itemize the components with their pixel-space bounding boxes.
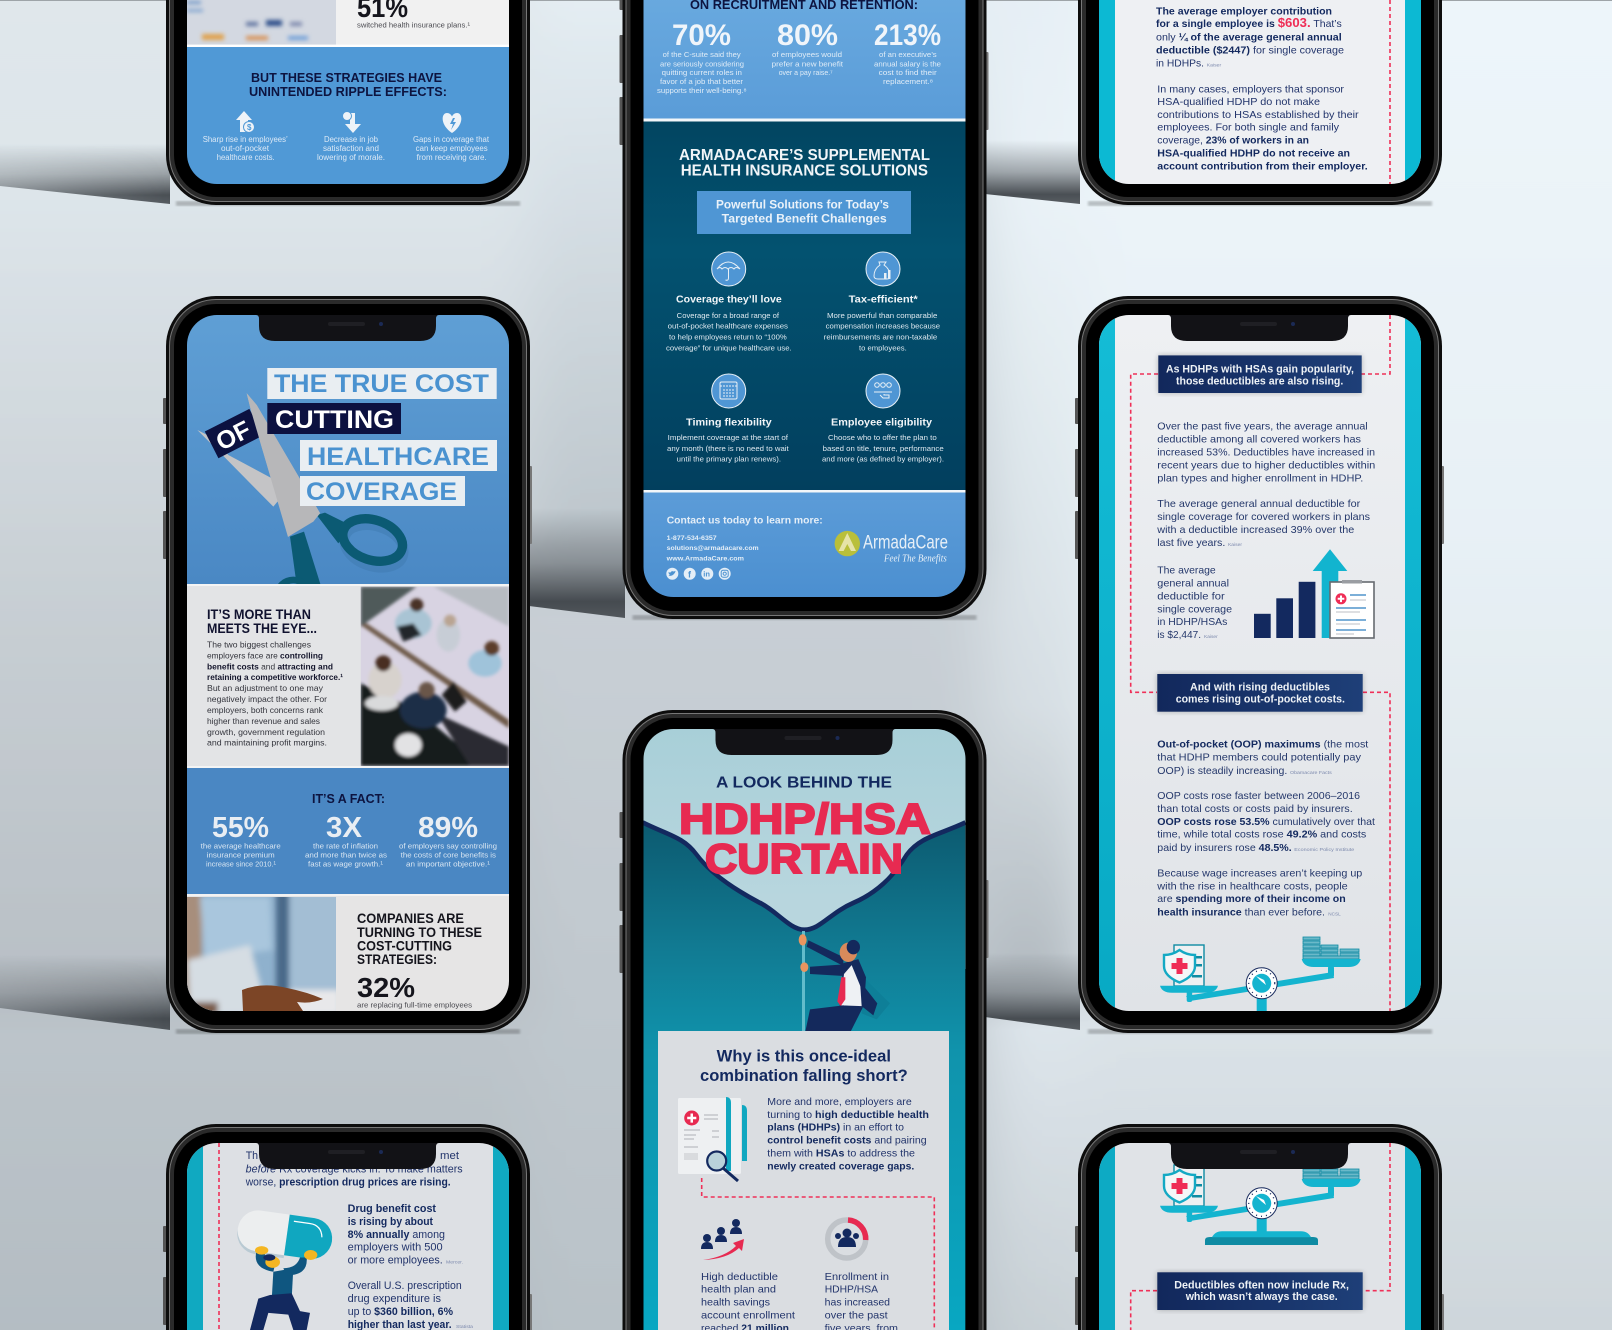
text: enrollment increase bbox=[825, 1272, 898, 1330]
text: rx intro: worse, prescription drug prices are rising. bbox=[245, 1176, 451, 1188]
captions: facts: an important objective.¹ bbox=[406, 859, 490, 868]
panel: recruitment and retention stats bbox=[643, 0, 966, 118]
text: challenges paragraph: growth, government regulation bbox=[207, 727, 325, 737]
screen: employer contribution bbox=[1099, 0, 1421, 184]
title: cutting: CUTTING bbox=[275, 406, 394, 434]
feature: coverage they'll love bbox=[666, 294, 792, 352]
stat: 32% bbox=[357, 978, 472, 1009]
text: us prescription expenditure: Overall U.S. prescription bbox=[348, 1280, 462, 1292]
feature: timing flexibility: until the primary plan renews). bbox=[677, 455, 781, 464]
feature: coverage they'll love: coverage” for unique healthcare use. bbox=[666, 343, 792, 352]
text: challenges paragraph: higher than revenue and sales bbox=[207, 716, 320, 726]
text: general annual deductible: with a deductible increased 39% over the bbox=[1156, 525, 1355, 536]
panel: contact footer bbox=[643, 492, 966, 598]
text: oop costs rose: Economic Policy Institute bbox=[1294, 847, 1355, 852]
icon: calendar bbox=[712, 374, 746, 408]
banner: deductibles rising bbox=[1158, 355, 1362, 393]
text: rx intro: met bbox=[440, 1150, 459, 1162]
heading: ripple effects bbox=[250, 73, 446, 96]
text: contact details bbox=[666, 514, 823, 562]
logo: armadacare: Feel The Benefits bbox=[883, 553, 947, 565]
feature: employee eligibility bbox=[822, 416, 944, 464]
heading: cost-cutting strategies: STRATEGIES: bbox=[357, 952, 437, 967]
title: hdhp/hsa curtain bbox=[679, 795, 931, 882]
text: oop costs rose: OOP costs rose faster between 2006–2016 bbox=[1157, 791, 1360, 802]
text: $2,447 deductible: general annual bbox=[1157, 579, 1229, 590]
heading: cost-cutting strategies: TURNING TO THESE bbox=[357, 925, 482, 940]
text: challenges paragraph: negatively impact the other. For bbox=[207, 694, 327, 704]
text: $2,447 deductible: Kaiser bbox=[1204, 634, 1218, 639]
screen: rising deductibles bbox=[1099, 315, 1421, 1025]
icon: cost arrow up bbox=[236, 111, 254, 132]
captions: ripple effects: satisfaction and bbox=[323, 144, 379, 153]
text: past five years bbox=[1157, 422, 1376, 484]
text: oop costs rose: time, while total costs rose 49.2% and costs bbox=[1157, 830, 1366, 841]
text: challenges paragraph: benefit costs and attracting and bbox=[207, 661, 333, 671]
panel: cost-cutting strategies bbox=[180, 890, 509, 1015]
heading: more than meets the eye bbox=[208, 610, 316, 633]
panel: more than meets the eye bbox=[187, 584, 509, 768]
heading: ripple effects: UNINTENDED RIPPLE EFFECTS: bbox=[249, 84, 447, 99]
logo: armadacare bbox=[835, 531, 948, 565]
panel: why is this once-ideal combination falling short bbox=[658, 1031, 949, 1330]
text: drug benefit cost: employers with 500 bbox=[348, 1242, 443, 1254]
banner: deductibles rising: those deductibles are also rising. bbox=[1176, 376, 1343, 388]
heading: why falling short: Why is this once-ideal bbox=[717, 1048, 891, 1066]
captions: facts: fast as wage growth.¹ bbox=[308, 859, 383, 868]
captions: ripple effects: Sharp rise in employees’ bbox=[203, 135, 288, 144]
phone: hdhp/hsa curtain screen (bottom center) bbox=[620, 710, 988, 1330]
stats: 55%, 3X, 89% bbox=[212, 816, 478, 838]
heading: it's a fact: IT’S A FACT: bbox=[312, 791, 385, 806]
text: wage increases: with the rise in healthcare costs, people bbox=[1156, 882, 1348, 893]
heading: more than meets the eye: IT’S MORE THAN bbox=[207, 607, 311, 622]
text: enrollment increase: Enrollment in bbox=[825, 1272, 889, 1283]
text: past five years: increased 53%. Deductibles have increased in bbox=[1157, 447, 1375, 458]
feature: tax-efficient: More powerful than comparable bbox=[827, 311, 937, 320]
phone: deductibles include rx screen (bottom right) bbox=[1075, 1124, 1444, 1330]
feature: employee eligibility: and more (as defined by employer). bbox=[822, 455, 944, 464]
text: wage increases bbox=[1156, 868, 1363, 918]
feature: employee eligibility: Choose who to offer the plan to bbox=[828, 433, 937, 442]
screen: curtain bbox=[643, 729, 966, 1330]
heading: supplemental solutions: HEALTH INSURANCE SOLUTIONS bbox=[681, 163, 928, 180]
text: enrollment increase: has increased bbox=[825, 1298, 890, 1308]
text: employers turning to hdhps: plans (HDHPs) in an effort to bbox=[767, 1123, 904, 1134]
captions: facts: insurance premium bbox=[207, 850, 275, 860]
panel: title area bbox=[187, 315, 509, 610]
text: challenges paragraph: retaining a competitive workforce.¹ bbox=[207, 672, 343, 682]
stats: 55%, 3X, 89%: 89% bbox=[418, 812, 478, 844]
banner: deductibles include rx bbox=[1157, 1272, 1363, 1310]
feature: tax-efficient bbox=[824, 294, 940, 352]
text: challenges paragraph: But an adjustment to one may bbox=[207, 683, 324, 693]
captions: recruitment stats: quitting current roles in bbox=[662, 68, 742, 77]
text: past five years: deductible among all covered workers has bbox=[1157, 435, 1361, 446]
feature: timing flexibility bbox=[667, 416, 789, 464]
icon: people with rising arrow bbox=[701, 1219, 744, 1260]
illustration: balance scale bbox=[1160, 937, 1361, 1025]
illustration: curtain bbox=[643, 823, 965, 1330]
heading: cost-cutting strategies: COMPANIES ARE bbox=[357, 911, 464, 926]
text: hsa contributions: contributions to HSAs established by their bbox=[1157, 110, 1359, 121]
callout: powerful solutions bbox=[697, 191, 911, 234]
icon: money bag with chart bbox=[866, 252, 900, 286]
text: us prescription expenditure: drug expenditure is bbox=[348, 1293, 441, 1305]
text: hsa contributions: HSA-qualified HDHP do not make bbox=[1157, 97, 1320, 108]
icon: morale arrow down bbox=[342, 112, 361, 133]
text: oop maximums bbox=[1157, 740, 1368, 777]
captions: recruitment stats: of the C-suite said they bbox=[663, 50, 741, 59]
text: past five years: Over the past five years, the average annual bbox=[1157, 422, 1368, 433]
text: $2,447 deductible: The average bbox=[1157, 566, 1216, 577]
captions: ripple effects bbox=[203, 135, 490, 162]
text: $2,447 deductible bbox=[1157, 566, 1232, 641]
text: contact details: Contact us today to learn more: bbox=[667, 514, 823, 526]
icon: medical receipt with magnifier bbox=[678, 1097, 752, 1181]
text: average employer contribution: in HDHPs. bbox=[1156, 58, 1204, 69]
title: hdhp/hsa curtain: HDHP/HSA bbox=[679, 795, 931, 843]
captions: recruitment stats: annual salary is the bbox=[874, 59, 941, 68]
text: drug benefit cost: is rising by about bbox=[348, 1216, 433, 1228]
text: challenges paragraph: and maintaining profit margins. bbox=[207, 738, 327, 748]
phone: the true cost screen (middle left) bbox=[163, 296, 532, 1034]
text: drug benefit cost: Drug benefit cost bbox=[348, 1203, 436, 1215]
text: drug benefit cost: Mercer. bbox=[446, 1260, 463, 1265]
icon: people and hand bbox=[866, 374, 900, 408]
feature: timing flexibility: any month (there is no need to wait bbox=[667, 444, 789, 453]
illustration: curtain edge bbox=[643, 823, 965, 930]
feature: tax-efficient: to employees. bbox=[859, 343, 907, 352]
panel: unintended ripple effects bbox=[187, 47, 509, 184]
illustration: man pulling curtain rope bbox=[799, 931, 890, 1031]
feature: timing flexibility: Timing flexibility bbox=[686, 416, 772, 428]
text: $2,447 deductible: is $2,447. bbox=[1157, 630, 1201, 641]
screen: true cost bbox=[180, 315, 509, 1015]
icon: broken heart bbox=[443, 113, 461, 133]
banner: deductibles rising: As HDHPs with HSAs gain popularity, bbox=[1166, 363, 1354, 375]
title: the true cost: THE TRUE COST bbox=[274, 370, 489, 398]
text: $2,447 deductible: single coverage bbox=[1157, 604, 1232, 615]
text: enrollment increase: over the past bbox=[825, 1310, 888, 1321]
text: rx intro: Th bbox=[246, 1150, 258, 1162]
text: $2,447 deductible: deductible for bbox=[1157, 591, 1225, 602]
captions: facts: the average healthcare bbox=[201, 842, 281, 851]
callout: powerful solutions: Powerful Solutions for Today’s bbox=[716, 198, 889, 212]
heading: cost-cutting strategies: COST-CUTTING bbox=[357, 938, 452, 953]
text: challenges paragraph: employers, both concerns rank bbox=[207, 705, 324, 715]
captions: facts bbox=[201, 842, 497, 868]
chart: rising bars with arrow and clipboard bbox=[1254, 549, 1374, 638]
photo: man at desk bbox=[187, 897, 336, 1011]
text: hdhp enrollment 21 million: account enrollment bbox=[701, 1310, 795, 1321]
screen: ripple effects bbox=[187, 0, 509, 184]
text: wage increases: health insurance than ever before. bbox=[1157, 907, 1325, 918]
screen: armadacare solutions bbox=[643, 0, 966, 598]
captions: ripple effects: Decrease in job bbox=[324, 135, 379, 144]
stats: 70%, 80%, 213% bbox=[672, 19, 941, 52]
text: average employer contribution: deductible ($2447) for single coverage bbox=[1156, 45, 1344, 56]
heading: supplemental solutions bbox=[679, 147, 930, 180]
captions: ripple effects: healthcare costs. bbox=[217, 153, 275, 162]
icon: cost arrow up: $ bbox=[247, 123, 252, 132]
feature: coverage they'll love: out-of-pocket healthcare expenses bbox=[668, 322, 788, 331]
text: employers turning to hdhps: turning to high deductible health bbox=[767, 1110, 929, 1121]
text: hsa contributions: account contribution from their employer. bbox=[1157, 161, 1368, 172]
illustration: balance scale bbox=[1160, 1157, 1361, 1245]
text: hdhp enrollment 21 million: health plan and bbox=[701, 1285, 776, 1296]
text: challenges paragraph: The two biggest challenges bbox=[207, 639, 311, 649]
captions: facts: of employers say controlling bbox=[399, 842, 497, 851]
phone: armadacare solutions screen (top center) bbox=[620, 0, 988, 620]
text: us prescription expenditure: up to $360 billion, 6% bbox=[348, 1306, 454, 1318]
heading: more than meets the eye: MEETS THE EYE... bbox=[207, 621, 317, 636]
icon: umbrella bbox=[712, 252, 746, 286]
banner: deductibles include rx: which wasn’t always the case. bbox=[1185, 1291, 1338, 1303]
captions: facts: the rate of inflation bbox=[313, 842, 378, 851]
text: us prescription expenditure bbox=[348, 1280, 474, 1330]
callout: powerful solutions: Targeted Benefit Challenges bbox=[722, 212, 887, 226]
captions: facts: increase since 2010.¹ bbox=[206, 859, 276, 868]
text: drug benefit cost: 8% annually among bbox=[348, 1229, 445, 1241]
feature: employee eligibility: based on title, tenure, performance bbox=[823, 444, 944, 453]
text: hsa contributions bbox=[1157, 84, 1368, 172]
captions: recruitment stats: replacement.⁸ bbox=[883, 77, 933, 86]
text: rx intro bbox=[245, 1150, 463, 1188]
feature: employee eligibility: Employee eligibility bbox=[831, 416, 932, 428]
text: contact details: solutions@armadacare.com bbox=[667, 545, 759, 552]
text: employers turning to hdhps bbox=[767, 1097, 929, 1173]
captions: facts: the costs of core benefits is bbox=[401, 850, 496, 860]
text: drug benefit cost: or more employees. bbox=[348, 1255, 443, 1267]
text: hdhp enrollment 21 million bbox=[701, 1272, 795, 1330]
text: hsa contributions: coverage, 23% of workers in an bbox=[1157, 136, 1309, 147]
feature: coverage they'll love: Coverage they’ll love bbox=[676, 294, 782, 306]
text: oop costs rose: paid by insurers rose 48.5%. bbox=[1157, 843, 1292, 854]
icons: social media: f bbox=[688, 570, 692, 580]
feature: coverage they'll love: Coverage for a broad range of bbox=[677, 311, 779, 320]
icons: social media bbox=[666, 568, 731, 580]
text: general annual deductible: single coverage for covered workers in plans bbox=[1157, 512, 1370, 523]
captions: recruitment stats: favor of a job that better bbox=[660, 77, 744, 86]
text: oop costs rose: than total costs or costs paid by insurers. bbox=[1157, 804, 1353, 815]
text: oop maximums: Out-of-pocket (OOP) maximums (the most bbox=[1157, 740, 1368, 751]
feature: coverage they'll love: to help employees return to “100% bbox=[669, 332, 787, 342]
heading: supplemental solutions: ARMADACARE’S SUPPLEMENTAL bbox=[679, 147, 930, 164]
stats: 70%, 80%, 213%: 213% bbox=[874, 19, 941, 52]
heading: why falling short bbox=[700, 1048, 908, 1085]
text: hsa contributions: HSA-qualified HDHP do not receive an bbox=[1157, 148, 1350, 159]
icon: enrollment ring bbox=[828, 1220, 866, 1258]
text: employers turning to hdhps: More and more, employers are bbox=[767, 1097, 912, 1108]
text: past five years: recent years due to higher deductibles within bbox=[1157, 460, 1376, 471]
text: $2,447 deductible: in HDHP/HSAs bbox=[1157, 617, 1227, 628]
text: average employer contribution: The average employer contribution bbox=[1156, 6, 1332, 17]
title: of (rotated tag) bbox=[205, 409, 263, 459]
captions: recruitment stats: cost to find their bbox=[879, 68, 937, 77]
title: a look behind the: A LOOK BEHIND THE bbox=[716, 775, 892, 792]
logo: armadacare: ArmadaCare bbox=[863, 532, 948, 553]
stat: 32%: 32% bbox=[357, 972, 415, 1003]
icon: scissors upper blade bbox=[247, 393, 320, 537]
text: wage increases: are spending more of their income on bbox=[1157, 894, 1346, 905]
title: hdhp/hsa curtain: CURTAIN bbox=[705, 835, 903, 882]
captions: recruitment stats: of employees would bbox=[772, 50, 842, 59]
photo: blurred chart printout bbox=[187, 0, 336, 45]
captions: recruitment stats bbox=[657, 50, 941, 95]
title: healthcare: HEALTHCARE bbox=[307, 443, 489, 471]
text: us prescription expenditure: Statista bbox=[456, 1324, 474, 1329]
text: contact details: www.ArmadaCare.com bbox=[666, 556, 744, 562]
stats: 70%, 80%, 213%: 70% bbox=[672, 19, 731, 52]
icon: person lifting pill bbox=[235, 1208, 335, 1330]
stat: 32%: are replacing full-time employees bbox=[357, 1000, 472, 1010]
text: general annual deductible bbox=[1156, 499, 1370, 549]
captions: facts: and more than twice as bbox=[305, 850, 387, 860]
text: employers turning to hdhps: control benefit costs and pairing bbox=[767, 1136, 927, 1146]
icons: social media: in bbox=[703, 570, 710, 579]
stat: 51% bbox=[357, 0, 471, 30]
text: enrollment increase: HDHP/HSA bbox=[825, 1285, 878, 1296]
captions: ripple effects: Gaps in coverage that bbox=[413, 135, 490, 144]
stat: 51%: switched health insurance plans.¹ bbox=[357, 21, 471, 30]
title: of (rotated tag): OF bbox=[212, 416, 255, 456]
text: drug benefit cost bbox=[348, 1203, 463, 1267]
text: contact details: 1-877-534-6357 bbox=[667, 535, 717, 542]
icon: scissors bbox=[197, 393, 409, 610]
text: hdhp enrollment 21 million: High deductible bbox=[701, 1272, 778, 1283]
captions: ripple effects: lowering of morale. bbox=[317, 153, 385, 162]
heading: ripple effects: BUT THESE STRATEGIES HAVE bbox=[251, 70, 442, 85]
banner: deductibles include rx: Deductibles often now include Rx, bbox=[1174, 1279, 1349, 1291]
stats: 70%, 80%, 213%: 80% bbox=[777, 19, 838, 52]
text: employers turning to hdhps: them with HSAs to address the bbox=[767, 1148, 915, 1159]
screen: deductibles include rx bbox=[1099, 1143, 1421, 1330]
captions: recruitment stats: of an executive’s bbox=[879, 50, 937, 59]
banner: rising out-of-pocket bbox=[1157, 674, 1363, 712]
captions: recruitment stats: supports their well-being.⁸ bbox=[657, 86, 747, 95]
text: oop costs rose: OOP costs rose 53.5% cumulatively over that bbox=[1157, 817, 1375, 828]
text: hsa contributions: employees. For both single and family bbox=[1157, 123, 1340, 134]
text: general annual deductible: last five years. bbox=[1157, 538, 1225, 549]
text: challenges paragraph bbox=[207, 639, 343, 748]
phone: rising deductibles screen (middle right) bbox=[1075, 296, 1444, 1034]
text: oop maximums: Obamacare Facts bbox=[1290, 770, 1333, 775]
phone: ripple effects screen (top left) bbox=[163, 0, 532, 206]
captions: recruitment stats: over a pay raise.⁷ bbox=[779, 68, 833, 77]
photo: meeting seen from above bbox=[361, 587, 509, 766]
text: average employer contribution: Kaiser bbox=[1207, 62, 1222, 67]
captions: recruitment stats: are seriously considering bbox=[660, 59, 744, 68]
text: hdhp enrollment 21 million: health savings bbox=[701, 1298, 770, 1308]
captions: recruitment stats: prefer a new benefit bbox=[772, 59, 843, 68]
text: challenges paragraph: employers face are controlling bbox=[207, 650, 323, 660]
captions: ripple effects: out-of-pocket bbox=[221, 144, 270, 153]
heading: cost-cutting strategies bbox=[357, 914, 482, 964]
text: general annual deductible: The average general annual deductible for bbox=[1157, 499, 1361, 510]
text: oop maximums: that HDHP members could potentially pay bbox=[1157, 753, 1362, 764]
text: oop costs rose bbox=[1157, 791, 1375, 854]
banner: rising out-of-pocket: And with rising deductibles bbox=[1190, 681, 1330, 693]
captions: ripple effects: can keep employees bbox=[416, 144, 488, 153]
text: rx intro: before Rx coverage kicks in. To make matters bbox=[246, 1164, 463, 1176]
text: wage increases: NCSL bbox=[1328, 911, 1341, 916]
title: coverage: COVERAGE bbox=[306, 478, 457, 506]
text: past five years: plan types and higher enrollment in HDHP. bbox=[1157, 474, 1363, 484]
text: general annual deductible: Kaiser bbox=[1228, 542, 1243, 547]
text: oop maximums: OOP) is steadily increasing. bbox=[1157, 766, 1287, 777]
feature: tax-efficient: Tax-efficient* bbox=[849, 294, 919, 306]
feature: timing flexibility: Implement coverage at the start of bbox=[668, 433, 788, 442]
feature: tax-efficient: reimbursements are non-taxable bbox=[824, 332, 937, 342]
screen: rx costs bbox=[187, 1143, 509, 1330]
feature: tax-efficient: compensation increases because bbox=[826, 322, 940, 331]
banner: rising out-of-pocket: comes rising out-of-pocket costs. bbox=[1176, 694, 1345, 706]
stats: 55%, 3X, 89%: 55% bbox=[212, 812, 269, 844]
heading: why falling short: combination falling short? bbox=[700, 1067, 908, 1085]
captions: ripple effects: from receiving care. bbox=[417, 153, 487, 162]
stats: 55%, 3X, 89%: 3X bbox=[326, 812, 363, 844]
phone: rx costs screen (bottom left) bbox=[163, 1124, 532, 1330]
text: average employer contribution: only ¼ of the average general annual bbox=[1156, 33, 1342, 44]
text: employers turning to hdhps: newly created coverage gaps. bbox=[767, 1162, 914, 1173]
panel: supplemental solutions bbox=[643, 122, 966, 490]
text: wage increases: Because wage increases aren’t keeping up bbox=[1157, 868, 1363, 880]
phone: employer contribution screen (top right) bbox=[1075, 0, 1444, 206]
text: average employer contribution bbox=[1156, 6, 1344, 69]
text: hsa contributions: In many cases, employers that sponsor bbox=[1157, 84, 1345, 95]
text: average employer contribution: for a single employee is $603. That’s bbox=[1156, 15, 1342, 30]
panel: it's a fact bbox=[187, 766, 509, 894]
